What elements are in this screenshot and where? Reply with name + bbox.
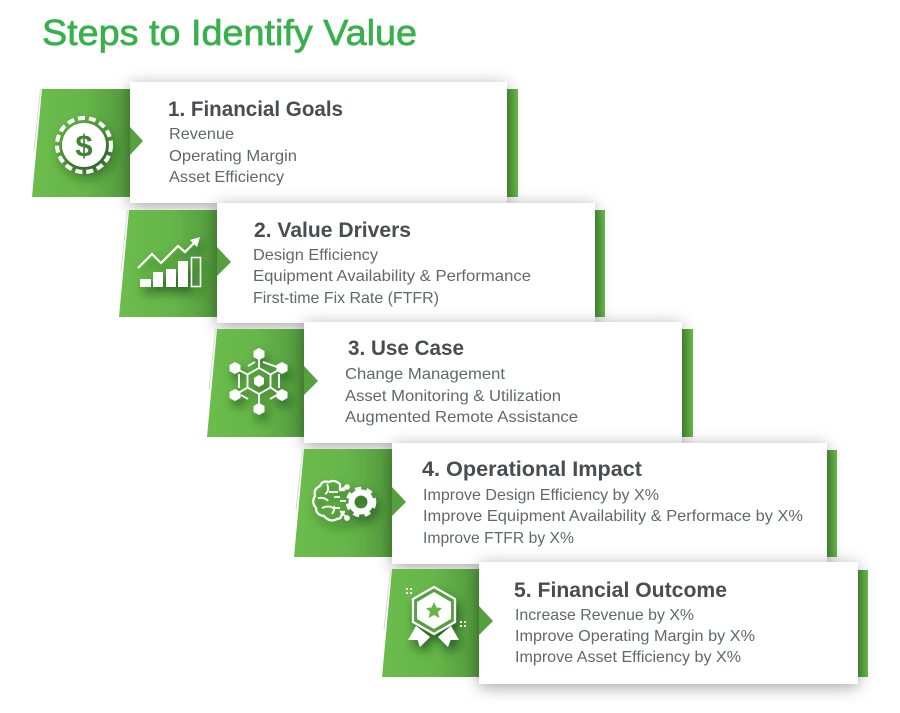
right accent bar (595, 210, 605, 317)
edge highlight (121, 210, 128, 271)
step 1: financial goals (32, 82, 518, 203)
list: Revenue (169, 126, 234, 143)
step 5: financial outcome (382, 562, 868, 684)
icon: brain and gear (313, 481, 374, 521)
edge highlight (209, 329, 216, 390)
green tab (32, 89, 131, 197)
icon: hexagon network (230, 348, 288, 415)
list: Increase Revenue by X% (515, 607, 694, 624)
list: Design Efficiency (253, 247, 378, 264)
icon: dollar coin: $ (75, 128, 93, 163)
icon: sparkles (406, 588, 466, 627)
list (423, 487, 803, 547)
step 2: value drivers (119, 203, 605, 323)
list: Improve Operating Margin by X% (515, 628, 755, 645)
card (479, 562, 858, 684)
icon: growth chart (138, 237, 200, 287)
list: Asset Monitoring & Utilization (345, 388, 561, 405)
step 3: use case (207, 322, 693, 443)
right accent bar (827, 450, 837, 557)
icon: award badge (408, 587, 459, 647)
pointer (479, 606, 493, 635)
card (392, 443, 827, 564)
edge highlight (34, 89, 40, 150)
green tab (119, 210, 218, 317)
list: First-time Fix Rate (FTFR) (253, 290, 439, 307)
list: Improve Asset Efficiency by X% (515, 649, 741, 666)
title: Steps to Identify Value (42, 12, 417, 53)
right accent bar (858, 570, 868, 677)
list: Operating Margin (169, 148, 297, 165)
list: Equipment Availability & Performance (253, 268, 531, 285)
list: Improve Design Efficiency by X% (423, 487, 659, 504)
pointer (304, 366, 318, 395)
card (304, 322, 682, 443)
list: Change Management (345, 366, 506, 383)
green tab (294, 449, 393, 557)
green tab (207, 329, 305, 437)
card (130, 82, 507, 203)
pointer (392, 487, 406, 516)
heading: 2. Value Drivers (254, 219, 411, 242)
step 4: operational impact (294, 443, 837, 564)
list (345, 366, 578, 426)
heading: 5. Financial Outcome (514, 579, 727, 602)
green tab (382, 569, 480, 677)
heading: 3. Use Case (348, 337, 464, 360)
list: Improve FTFR by X% (423, 530, 574, 547)
list (515, 607, 755, 666)
list: Improve Equipment Availability & Performace by X% (423, 508, 803, 525)
icon: dollar coin (57, 118, 111, 172)
right accent bar (682, 329, 693, 437)
pointer (217, 247, 231, 276)
list: Asset Efficiency (169, 169, 284, 186)
right accent bar (507, 89, 518, 197)
edge highlight (296, 449, 302, 510)
list (169, 126, 297, 186)
heading: 1. Financial Goals (168, 98, 343, 121)
edge highlight (384, 569, 390, 630)
heading: 4. Operational Impact (422, 458, 642, 481)
card (217, 203, 595, 323)
list: Augmented Remote Assistance (345, 409, 578, 426)
pointer (130, 127, 143, 155)
list (253, 247, 531, 307)
